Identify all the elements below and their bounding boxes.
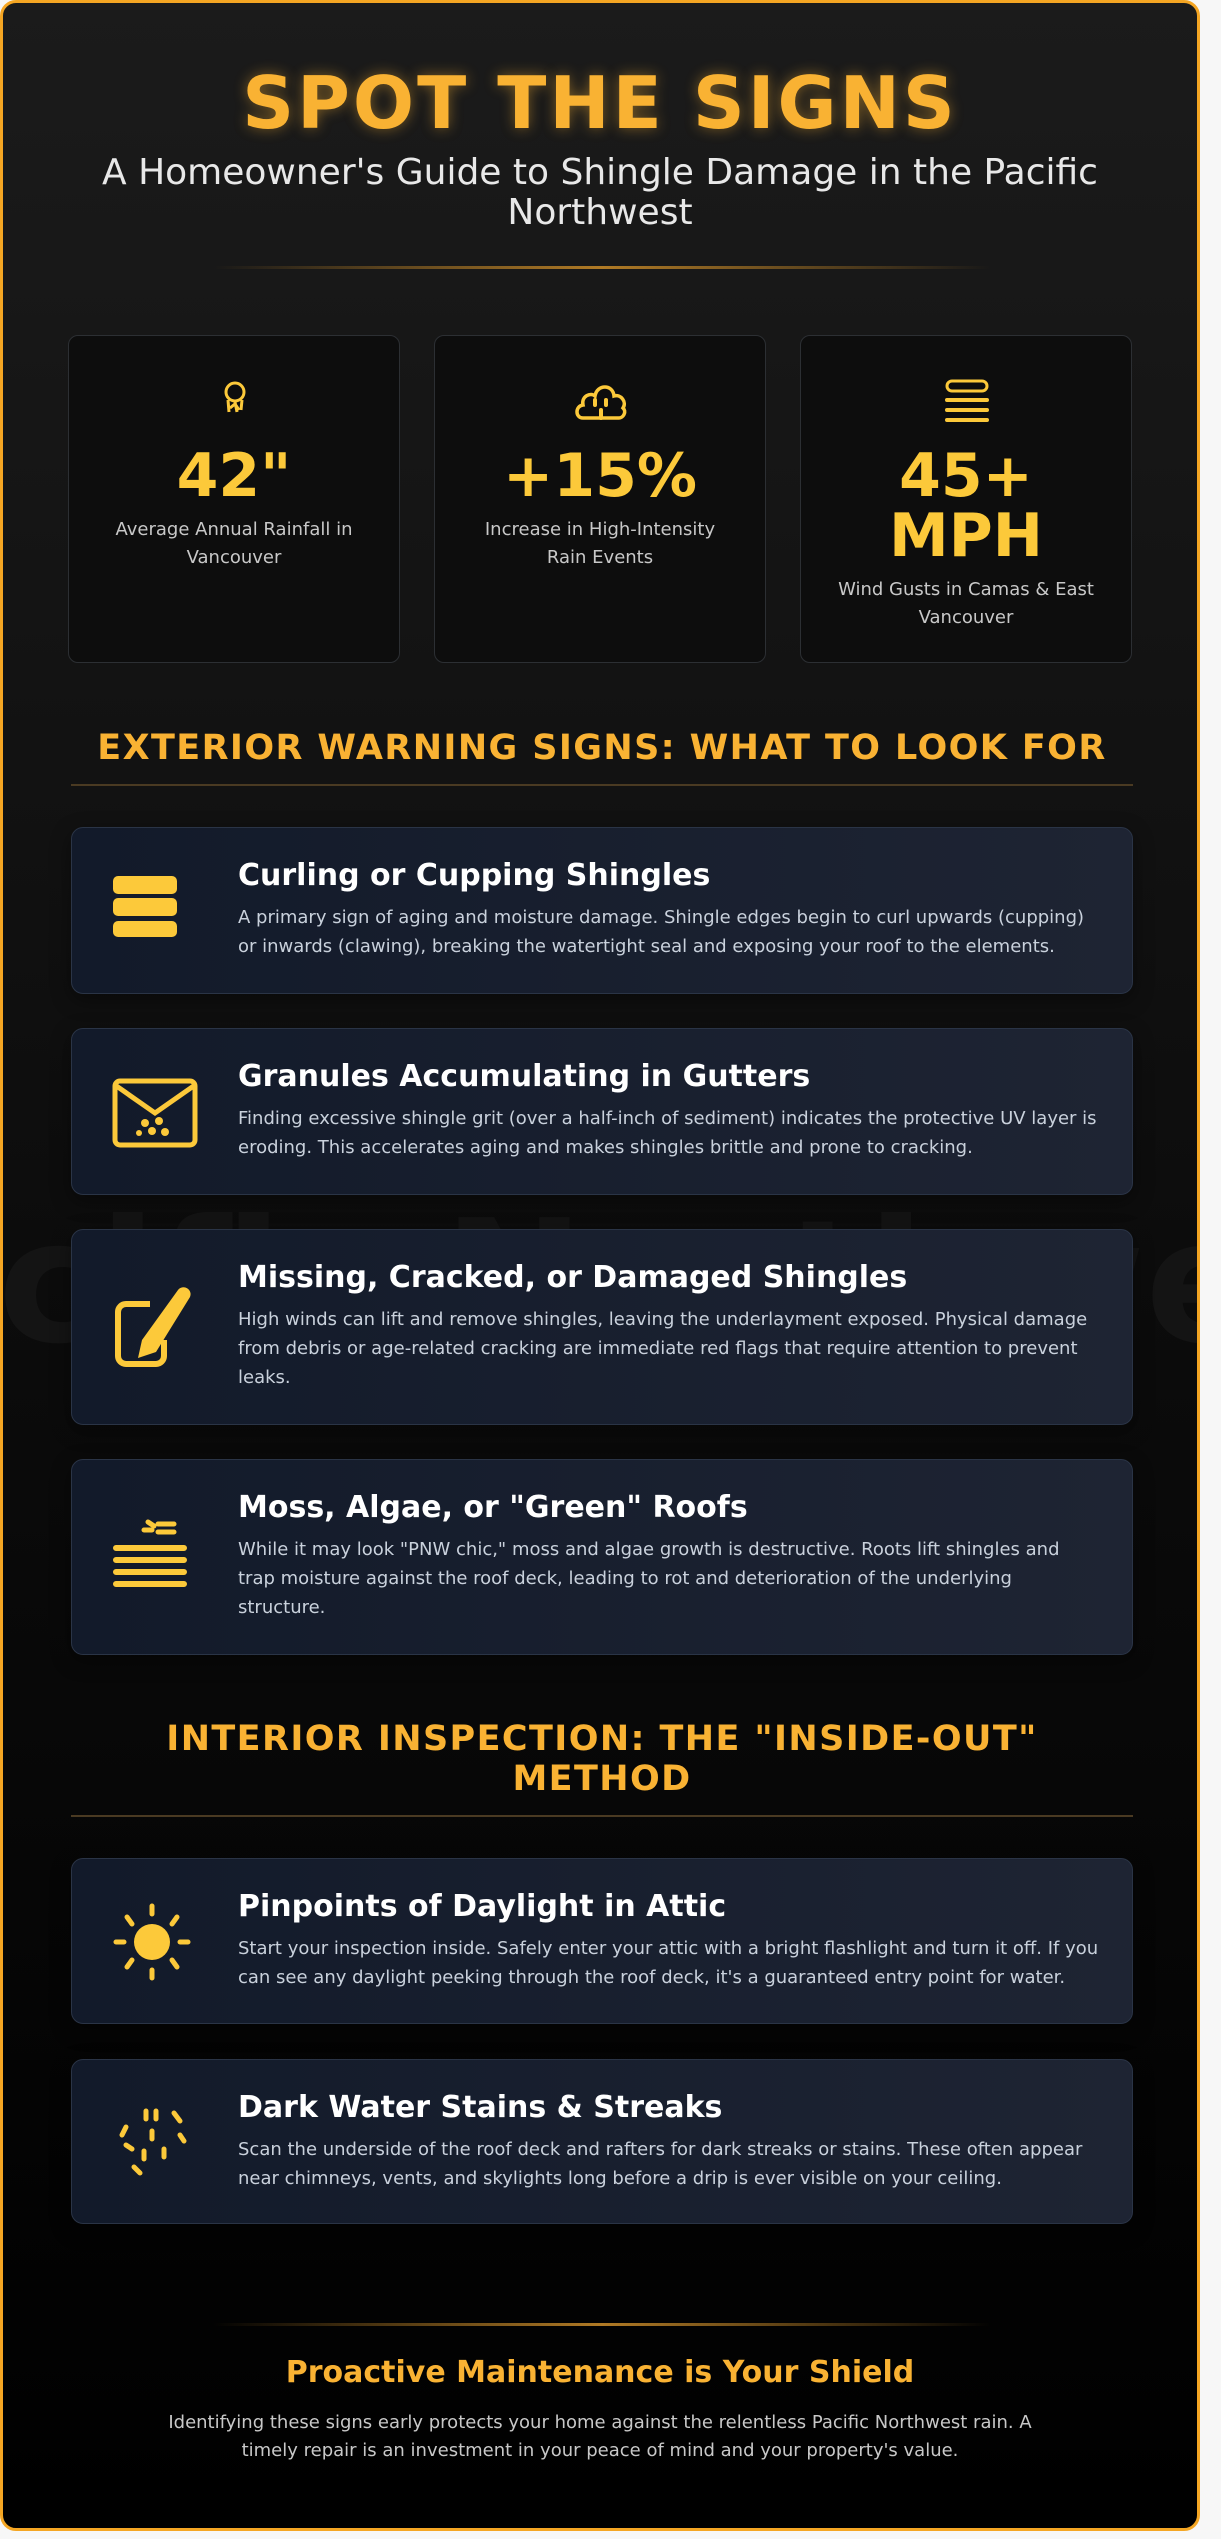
number	[889, 441, 1043, 571]
card: granules	[71, 1028, 1133, 1195]
icon: sun	[114, 1904, 190, 1980]
number: 45+	[899, 441, 1033, 511]
icon: gutter with grit	[112, 1078, 198, 1148]
label: Increase in High-Intensity Rain Events	[485, 519, 715, 568]
number: MPH	[889, 501, 1043, 571]
card: daylight: Pinpoints of Daylight in Attic	[238, 1889, 726, 1924]
card: missing: leaks.	[238, 1367, 291, 1388]
card: moss: structure.	[238, 1597, 325, 1618]
card: granules: eroding. This accelerates aging and makes shingles brittle and prone to cracking.	[238, 1137, 973, 1158]
card: curling: A primary sign of aging and moisture damage. Shingle edges begin to curl upwards (cupping)	[238, 907, 1084, 928]
number: +15%	[503, 441, 697, 511]
section heading: interior: METHOD	[512, 1759, 692, 1799]
label: Wind Gusts in Camas & East Vancouver	[838, 579, 1094, 628]
card: curling	[71, 827, 1133, 994]
card: water stains: Scan the underside of the roof deck and rafters for dark streaks or stains. These often appear	[238, 2139, 1082, 2160]
icon: pencil on square	[115, 1287, 191, 1367]
card: curling: Curling or Cupping Shingles	[238, 858, 710, 893]
card: missing	[71, 1229, 1133, 1425]
section heading: interior	[166, 1719, 1038, 1799]
card: granules: Granules Accumulating in Gutters	[238, 1059, 810, 1094]
card: daylight: Start your inspection inside. Safely enter your attic with a bright flashlight and turn it off. If you	[238, 1938, 1098, 1959]
section heading: exterior: EXTERIOR WARNING SIGNS: WHAT TO LOOK FOR	[97, 728, 1107, 768]
stat card: wind	[800, 335, 1132, 663]
subtitle: A Homeowner's Guide to Shingle Damage in the Pacific Northwest	[102, 152, 1098, 233]
icon: stacked shingles	[113, 876, 177, 937]
icon: wind bars	[945, 380, 989, 422]
title: SPOT THE SIGNS	[242, 61, 958, 145]
card: water stains: near chimneys, vents, and skylights long before a drip is ever visible on your ceiling.	[238, 2168, 1002, 2189]
section heading: interior: INTERIOR INSPECTION: THE "INSIDE-OUT"	[166, 1719, 1038, 1759]
card: moss: While it may look "PNW chic," moss and algae growth is destructive. Roots lift shingles and	[238, 1539, 1060, 1560]
card: missing: High winds can lift and remove shingles, leaving the underlayment exposed. Physical damage	[238, 1309, 1087, 1330]
footer title: Proactive Maintenance is Your Shield	[286, 2355, 914, 2390]
card: water stains	[71, 2059, 1133, 2224]
card: water stains: Dark Water Stains & Streaks	[238, 2090, 722, 2125]
card: daylight	[71, 1858, 1133, 2024]
icon: moss layers	[113, 1520, 187, 1587]
stat card: rain events	[434, 335, 766, 663]
icon: cloud	[575, 385, 626, 420]
card: moss	[71, 1459, 1133, 1655]
icon: rain head	[224, 382, 246, 412]
card: daylight: can see any daylight peeking through the roof deck, it's a guaranteed entry point for water.	[238, 1967, 1065, 1988]
card: missing: Missing, Cracked, or Damaged Shingles	[238, 1260, 907, 1295]
card: curling: or inwards (clawing), breaking the watertight seal and exposing your roof to the elements.	[238, 936, 1055, 957]
card: moss: Moss, Algae, or "Green" Roofs	[238, 1490, 748, 1525]
card: moss: trap moisture against the roof deck, leading to rot and deterioration of the underlying	[238, 1568, 1012, 1589]
footer text: Identifying these signs early protects your home against the relentless Pacific Northwest rain. A timely repair is an investment in your peace of mind and your property's value.	[168, 2412, 1032, 2461]
card: missing: from debris or age-related cracking are immediate red flags that require attention to prevent	[238, 1338, 1078, 1359]
card: granules: Finding excessive shingle grit (over a half-inch of sediment) indicates the protective UV layer is	[238, 1108, 1097, 1129]
icon: streaks	[120, 2108, 186, 2176]
number: 42"	[177, 441, 291, 511]
label: Average Annual Rainfall in Vancouver	[116, 519, 352, 568]
stat card: rainfall	[68, 335, 400, 663]
